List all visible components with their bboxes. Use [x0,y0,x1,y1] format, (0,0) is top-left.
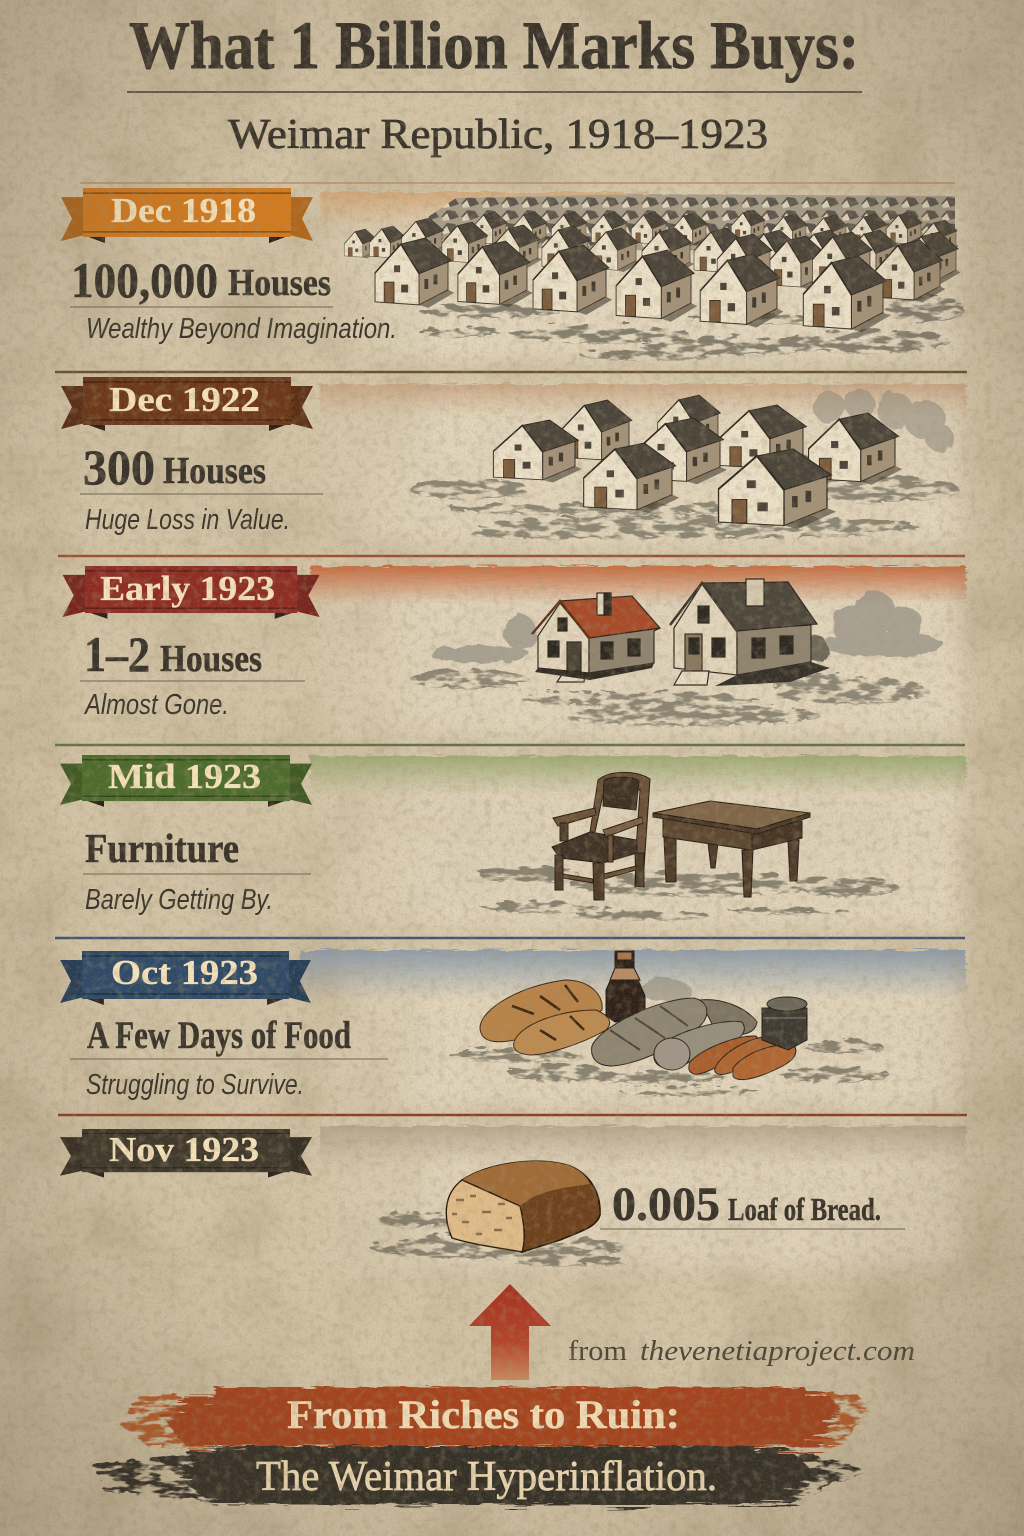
value: 300 Houses [80,439,323,495]
source credit: thevenetiaproject.com [640,1335,915,1367]
value: A Few Days of Food: A Few Days of Food [87,1014,351,1057]
title [127,7,862,158]
section dividers [55,183,967,1115]
ribbon: Oct 1923 [60,951,311,1005]
illustration: two houses [410,579,945,727]
ribbon: Nov 1923 [60,1129,312,1178]
value: 1-2 Houses: Houses [160,638,262,680]
illustration: field of 100,000 houses [344,194,965,361]
icon: sausages and salami [592,998,796,1080]
value: 0.005 Loaf of Bread: 0.005 [612,1178,720,1231]
arrow [469,1284,551,1380]
icon: bottle [606,951,645,1022]
icon: bread loaves [480,980,610,1055]
value: 100,000 Houses: 100,000 [71,252,218,308]
icon: chair [552,772,650,900]
panel: Early 1923 [63,566,945,727]
illustration: chair and table [480,772,900,921]
trees [430,592,945,663]
source credit: from [568,1336,627,1367]
ribbon: Dec 1918: Dec 1918 [111,191,256,230]
banner: From Riches to Ruin [95,1387,870,1504]
panel: Mid 1923 [60,755,900,921]
banner: From Riches to Ruin: The Weimar Hyperinflation. [256,1454,717,1500]
ribbon: Nov 1923: Nov 1923 [109,1130,259,1169]
caption: Barely Getting By. [85,884,273,916]
banner: From Riches to Ruin: From Riches to Ruin: [287,1392,680,1437]
ribbon: Dec 1922: Dec 1922 [109,380,260,419]
value: Furniture: Furniture [85,825,239,871]
caption: Huge Loss in Value. [85,504,290,536]
value: 1-2 Houses [80,626,305,682]
title: Weimar Republic, 1918–1923 [228,112,768,158]
value: 0.005 Loaf of Bread [600,1178,905,1231]
ribbon: Early 1923: Early 1923 [100,569,275,608]
value: 100,000 Houses [70,252,333,308]
value: 300 Houses: Houses [163,450,266,492]
caption: Wealthy Beyond Imagination. [86,313,397,345]
value: 0.005 Loaf of Bread: Loaf of Bread. [728,1191,881,1227]
illustration: 300 houses [410,389,960,540]
panel: Dec 1918 [61,188,965,361]
ribbon: Mid 1923 [60,755,312,807]
ribbon: Dec 1918 [61,188,313,243]
ribbon: Dec 1922 [61,377,313,431]
illustration: food [450,951,890,1097]
caption: Almost Gone. [83,689,229,721]
icon: grey-roofed house [670,579,830,686]
title: What 1 Billion Marks Buys: [129,7,859,83]
panel: Oct 1923 [60,951,890,1101]
value: 100,000 Houses: Houses [228,262,331,304]
ribbon: Mid 1923: Mid 1923 [108,757,261,796]
caption: Struggling to Survive. [86,1069,304,1101]
icon: table [653,801,810,897]
value: 1-2 Houses: 1–2 [84,626,150,682]
icon: tin [762,997,807,1050]
illustration: loaf of bread [370,1161,630,1267]
ribbon: Early 1923 [63,566,320,619]
icon: red-roofed house [532,593,660,682]
value: 300 Houses: 300 [83,439,155,495]
panel: Nov 1923 [60,1129,905,1267]
ribbon: Oct 1923: Oct 1923 [111,953,258,992]
panel: Dec 1922 [61,377,960,540]
